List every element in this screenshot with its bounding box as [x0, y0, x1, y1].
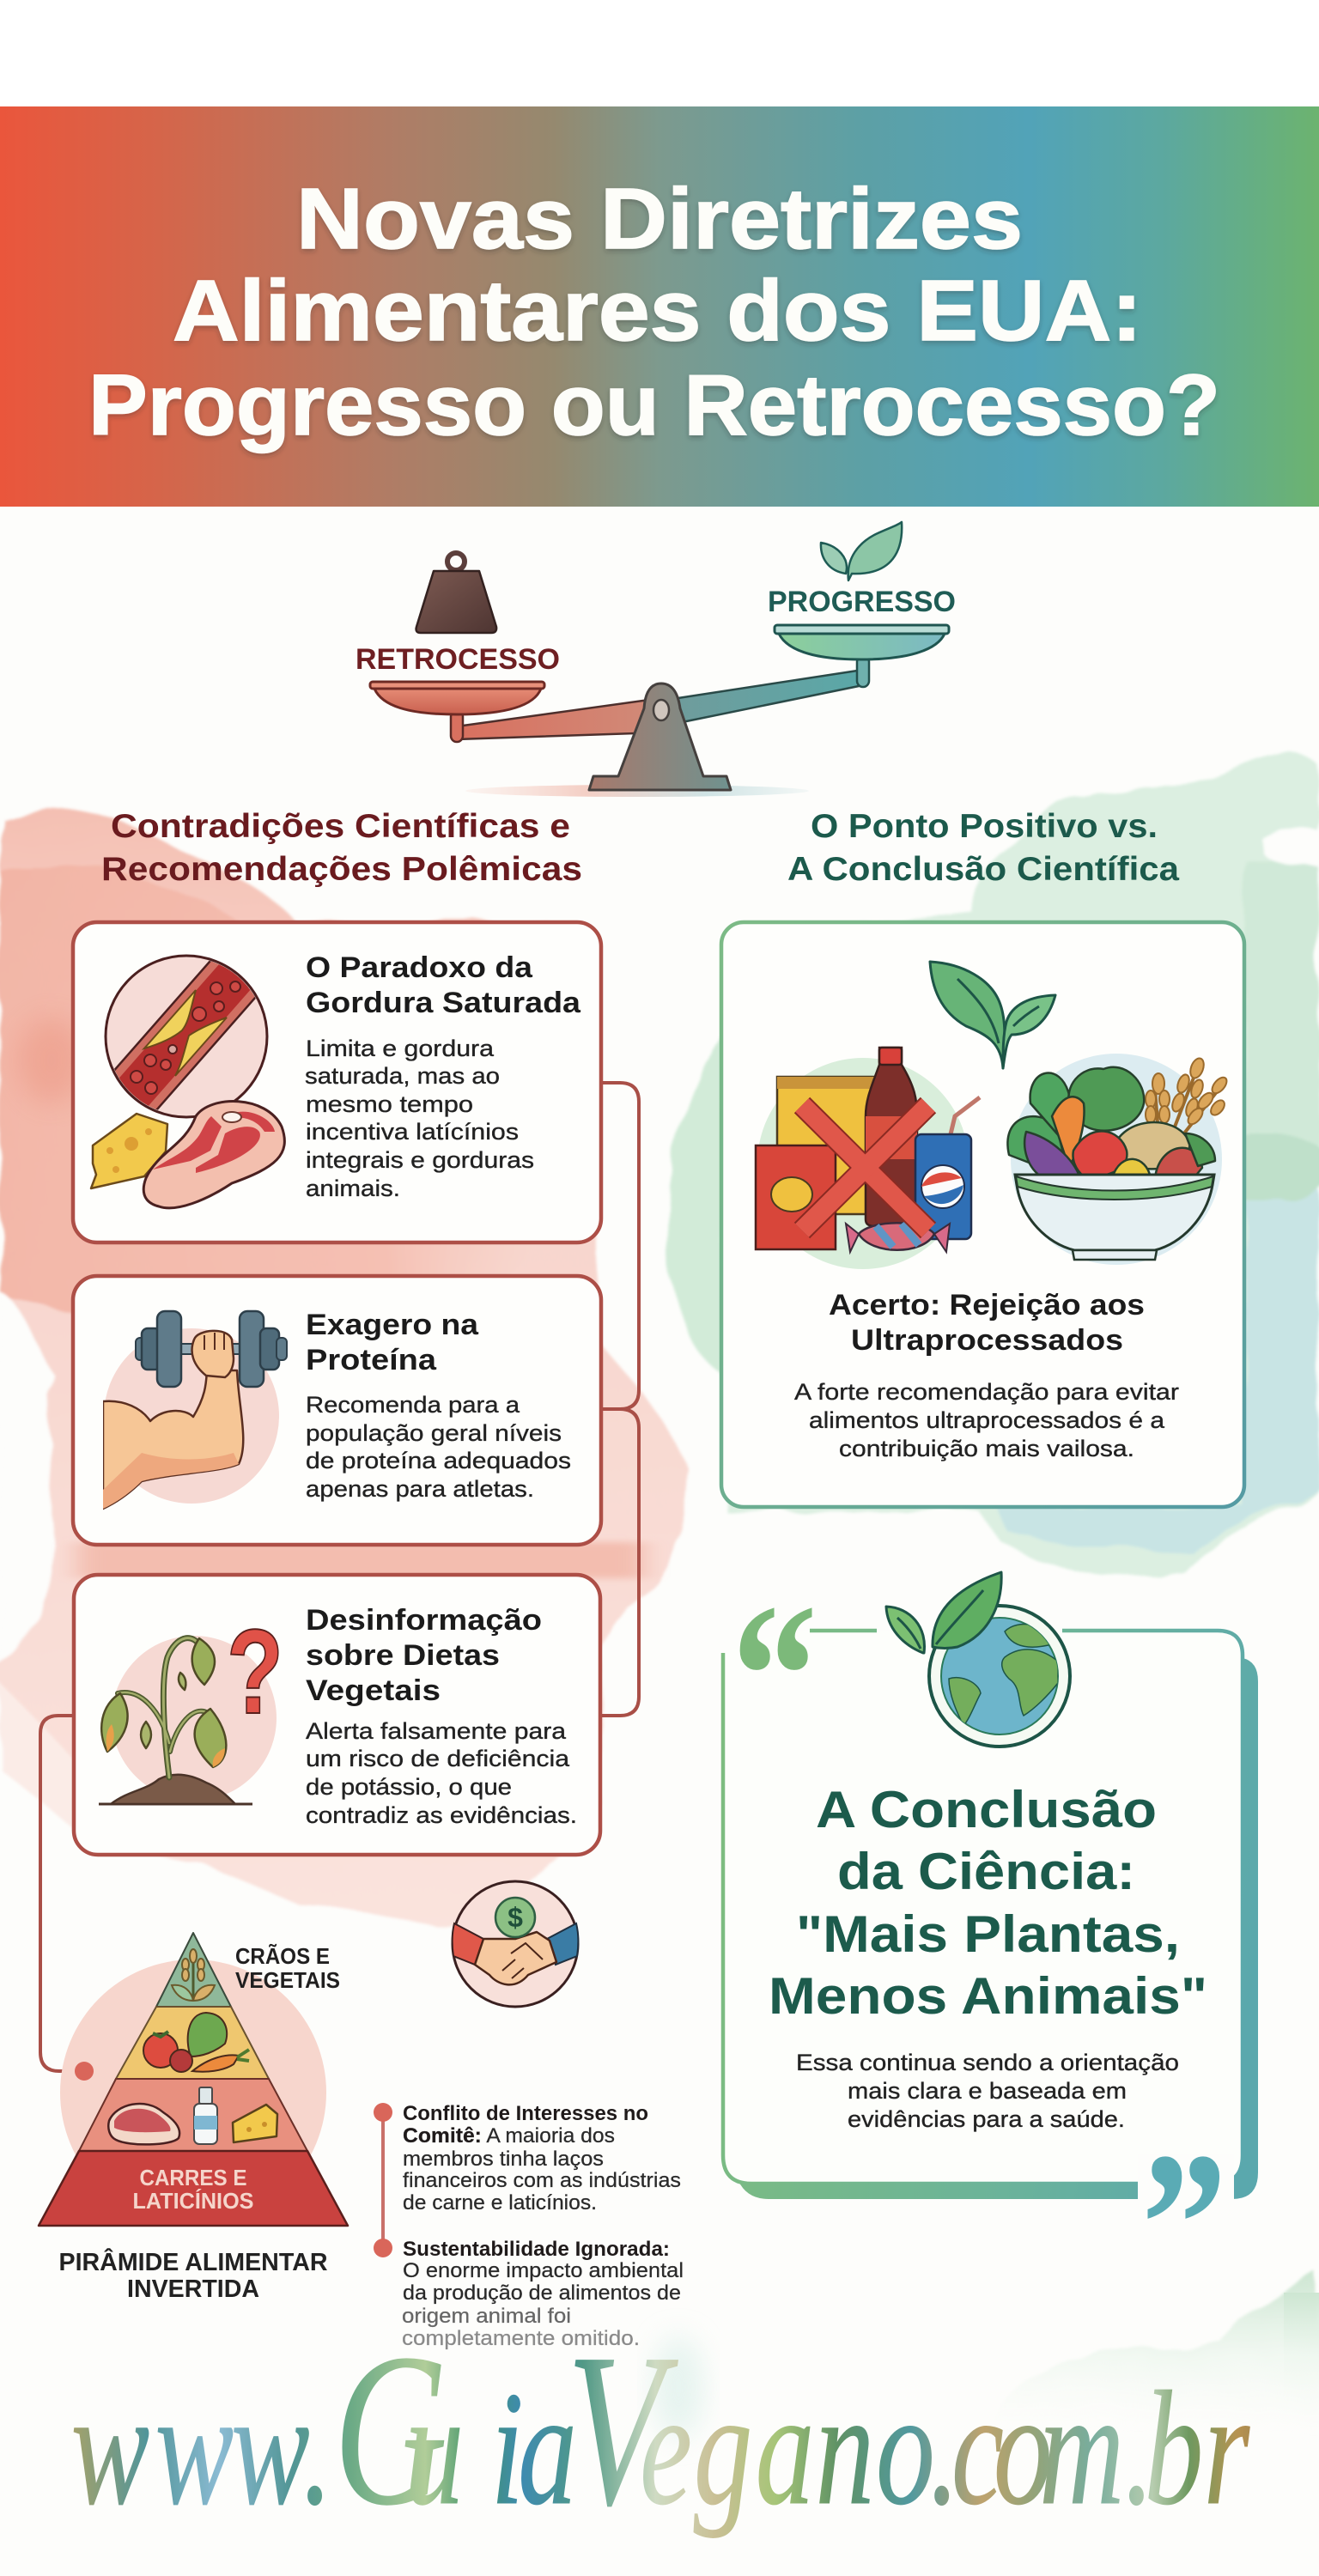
card body text	[794, 1379, 1179, 1461]
icon: handshake with dollar coin: $	[508, 1902, 523, 1933]
icon: handshake with dollar coin	[453, 1881, 578, 2007]
watercolor website logo: egano.com.br	[640, 2357, 1250, 2538]
pyramid infographic	[39, 1933, 348, 2303]
conclusion title: A Conclusão	[816, 1781, 1157, 1838]
timeline of extra critiques	[374, 2102, 684, 2350]
scale shadow	[465, 785, 809, 797]
pyramid background circle	[60, 1959, 326, 2226]
heading: right column	[787, 808, 1179, 888]
card body text: animais.	[306, 1176, 400, 1201]
text: sustainability ignored: origem animal foi	[402, 2305, 571, 2328]
panel: conclusion quote	[721, 1571, 1258, 2219]
text: conflict of interest: financeiros com as indústrias	[403, 2169, 681, 2192]
label: retrocesso: RETROCESSO	[356, 643, 560, 676]
pyramid label: bottom tier: LATICÍNIOS	[132, 2188, 254, 2214]
card box	[73, 922, 601, 1242]
card body text: alimentos ultraprocessados é a	[809, 1407, 1165, 1433]
icon: ultra-processed foods crossed out	[756, 1048, 980, 1269]
scale beam right	[661, 670, 863, 726]
title	[88, 171, 1220, 453]
icon: progress leaves	[821, 522, 902, 580]
panel: ultra-processed card	[721, 922, 1244, 1507]
card body text: apenas para atletas.	[306, 1476, 534, 1502]
background watercolor: pale tint behind logo	[653, 2336, 704, 2439]
text: conflict of interest	[403, 2102, 681, 2215]
background watercolor: right edge strip	[1284, 2293, 1319, 2404]
icon: vegetables	[143, 2013, 249, 2072]
heading: left column: Recomendações Polêmicas	[101, 851, 582, 888]
card body text: contradiz as evidências.	[306, 1802, 577, 1828]
card heading: O Paradoxo da	[306, 951, 533, 984]
right pan	[775, 625, 949, 659]
pyramid tier: meat and dairy	[39, 2151, 348, 2226]
text: conflict of interest: membros tinha laços	[403, 2148, 604, 2171]
background watercolor: red wash	[0, 809, 689, 1928]
icon: twin leaves	[930, 962, 1055, 1068]
card heading: Desinformação	[306, 1604, 542, 1637]
heading: left column: Contradições Científicas e	[111, 808, 570, 845]
card body text	[305, 1036, 534, 1201]
card body text: contribuição mais vailosa.	[839, 1436, 1134, 1461]
opening quotation mark: “	[732, 1561, 818, 1789]
icon: wilted plant	[99, 1636, 277, 1804]
card box	[74, 1575, 600, 1855]
icon: weight	[416, 553, 496, 633]
icon: arm with dumbbell	[103, 1311, 287, 1509]
pyramid label: bottom tier: CARRES E	[139, 2165, 247, 2190]
card body text: Limita e gordura	[306, 1036, 495, 1061]
balance scale illustration	[356, 522, 956, 797]
text: conflict of interest: Comitê: A maioria dos	[403, 2124, 615, 2148]
pyramid label: top tier: CRÃOS E	[235, 1943, 330, 1969]
conclusion body text: evidências para a saúde.	[848, 2106, 1125, 2132]
card heading: Vegetais	[306, 1674, 441, 1707]
card box	[721, 922, 1244, 1507]
card heading: sobre Dietas	[306, 1639, 500, 1672]
icon: red question mark: ?	[227, 1604, 283, 1739]
conclusion body text: Essa continua sendo a orientação	[796, 2050, 1179, 2075]
conclusion body text	[796, 2050, 1179, 2132]
card body text: A forte recomendação para evitar	[794, 1379, 1179, 1405]
icon: cheese	[233, 2105, 277, 2142]
card heading	[306, 951, 581, 1019]
pyramid tier: vegetables	[116, 2007, 269, 2079]
panel: plant diet card	[74, 1575, 600, 1855]
background watercolor: red spot	[17, 1018, 86, 1103]
quote backing	[1138, 2154, 1234, 2222]
text: sustainability ignored: completamente omitido.	[402, 2327, 640, 2350]
watercolor website logo: V	[567, 2309, 678, 2550]
card heading	[306, 1309, 479, 1376]
panel: saturated fat card	[73, 922, 601, 1242]
icon: steak	[108, 2104, 179, 2144]
watercolor website logo: uia	[405, 2357, 577, 2538]
title: Progresso ou Retrocesso?	[88, 357, 1220, 453]
connector lines between cards	[40, 1083, 639, 2071]
card body text	[306, 1718, 577, 1828]
frame outline	[723, 1631, 1243, 2184]
left stem	[451, 711, 463, 742]
left pan	[370, 682, 544, 714]
fulcrum pin	[653, 700, 669, 720]
card heading: Proteína	[306, 1344, 437, 1376]
pyramid caption: INVERTIDA	[127, 2275, 259, 2303]
heading: right column: A Conclusão Científica	[787, 851, 1179, 888]
conclusion body text: mais clara e baseada em	[848, 2078, 1127, 2104]
panel: protein card	[73, 1276, 601, 1545]
header band	[0, 106, 1319, 507]
card body text: um risco de deficiência	[306, 1746, 570, 1771]
icon: artery and foods	[91, 955, 284, 1208]
card box	[73, 1276, 601, 1545]
right stem	[857, 656, 869, 687]
icon: milk bottle	[194, 2087, 217, 2144]
card heading: Acerto: Rejeição aos	[829, 1289, 1145, 1321]
card body text: incentiva latícínios	[306, 1119, 519, 1145]
watercolor website logo: www.	[71, 2357, 332, 2538]
conclusion title: "Mais Plantas,	[796, 1905, 1180, 1963]
timeline line and dots	[374, 2103, 392, 2257]
frame shadow band	[739, 1658, 1258, 2199]
pyramid label: top tier: VEGETAIS	[235, 1967, 340, 1993]
icon: wheat	[172, 1949, 215, 2001]
card body text: Recomenda para a	[306, 1392, 520, 1418]
card body text: Alerta falsamente para	[306, 1718, 567, 1744]
text: sustainability ignored	[402, 2238, 684, 2350]
card body text: população geral níveis	[306, 1420, 562, 1446]
closing quotation mark: ”	[1141, 2110, 1227, 2338]
conclusion title: da Ciência:	[837, 1843, 1135, 1900]
pyramid caption	[58, 2247, 328, 2303]
background watercolor: bottom green wash	[988, 2275, 1319, 2430]
watercolor website logo: G	[334, 2309, 447, 2550]
label: progresso: PROGRESSO	[768, 586, 956, 618]
pyramid tier: protein	[79, 2079, 307, 2151]
pyramid label: top tier	[235, 1943, 340, 1993]
card body text	[306, 1392, 571, 1502]
card heading	[306, 1604, 542, 1707]
card body text: integrais e gorduras	[306, 1147, 534, 1173]
text: conflict of interest: Conflito de Interesses no	[403, 2102, 648, 2125]
icon: vegetable bowl	[1007, 1054, 1230, 1265]
background watercolor: band between cards	[77, 1542, 644, 1578]
text: conflict of interest: de carne e laticínios.	[403, 2191, 597, 2215]
title: Novas Diretrizes	[296, 171, 1023, 267]
card heading: Ultraprocessados	[851, 1324, 1123, 1357]
text: sustainability ignored: Sustentabilidade Ignorada:	[403, 2238, 670, 2261]
text: sustainability ignored: da produção de alimentos de	[403, 2281, 681, 2305]
card body text: mesmo tempo	[306, 1091, 473, 1117]
card body text: de proteína adequados	[306, 1448, 571, 1473]
card heading	[829, 1289, 1145, 1357]
frame interior	[723, 1631, 1243, 2184]
top white margin	[0, 0, 1319, 106]
text: sustainability ignored: O enorme impacto ambiental	[403, 2259, 684, 2282]
pyramid label: bottom tier	[132, 2165, 254, 2214]
card heading: Exagero na	[306, 1309, 479, 1341]
connector end dot	[75, 2062, 94, 2081]
background watercolor: green wash	[666, 752, 1319, 1577]
card heading: Gordura Saturada	[306, 987, 581, 1019]
card body text: de potássio, o que	[306, 1774, 512, 1800]
scale fulcrum	[589, 683, 731, 790]
pyramid caption: PIRÂMIDE ALIMENTAR	[58, 2247, 328, 2276]
card body text: saturada, mas ao	[305, 1063, 500, 1089]
pyramid tier: grains	[156, 1933, 231, 2007]
conclusion title	[769, 1781, 1207, 2025]
heading: right column: O Ponto Positivo vs.	[811, 808, 1158, 845]
title: Alimentares dos EUA:	[173, 263, 1142, 359]
scale beam left	[457, 698, 661, 739]
conclusion title: Menos Animais"	[769, 1967, 1207, 2025]
icon: globe with leaves	[886, 1572, 1070, 1747]
heading: left column	[101, 808, 582, 888]
